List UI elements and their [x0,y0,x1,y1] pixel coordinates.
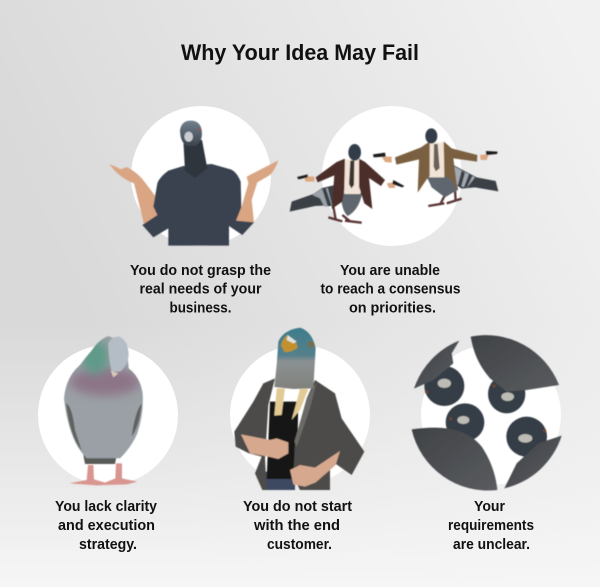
caption: You do not grasp the [130,263,271,279]
heads [424,366,547,457]
right pigeon [373,128,498,206]
caption: to reach a consensus [320,282,460,298]
caption [320,263,460,316]
circle backdrop [421,345,561,485]
caption [130,263,271,316]
eyes [425,384,546,433]
wings [412,335,562,491]
circle backdrop [38,345,178,485]
caption: requirements [448,518,534,534]
icon: shrugging pigeon man [109,121,278,246]
panel: end customer [230,328,370,553]
circle backdrop [131,106,271,246]
icon: four pigeons seen from below [412,335,562,491]
caption: strategy. [79,537,137,553]
circle backdrop [322,106,462,246]
beaks [438,379,532,443]
caption: customer. [267,537,332,553]
caption: and execution [58,518,155,534]
icon: person in pigeon mask [234,328,364,490]
caption: with the end [253,518,340,534]
caption: are unclear. [453,537,530,553]
panel: clarity [38,330,178,553]
caption [55,499,157,553]
caption: on priorities. [349,300,436,316]
icon: pigeon with bowed head [64,336,144,486]
caption: You lack clarity [55,499,157,515]
icon: two pigeons in suits with pistols [290,128,498,223]
caption [448,499,534,553]
caption: real needs of your [140,282,262,298]
caption [243,499,352,553]
caption: business. [170,300,232,316]
caption: You are unable [340,263,440,279]
panel: unclear requirements [412,335,562,553]
left pigeon [290,144,404,223]
circle backdrop [230,345,370,485]
caption: You do not start [243,499,352,515]
title: Why Your Idea May Fail [181,40,419,65]
panel: grasp needs [109,106,278,316]
panel: consensus [290,106,498,316]
caption: Your [474,499,505,515]
